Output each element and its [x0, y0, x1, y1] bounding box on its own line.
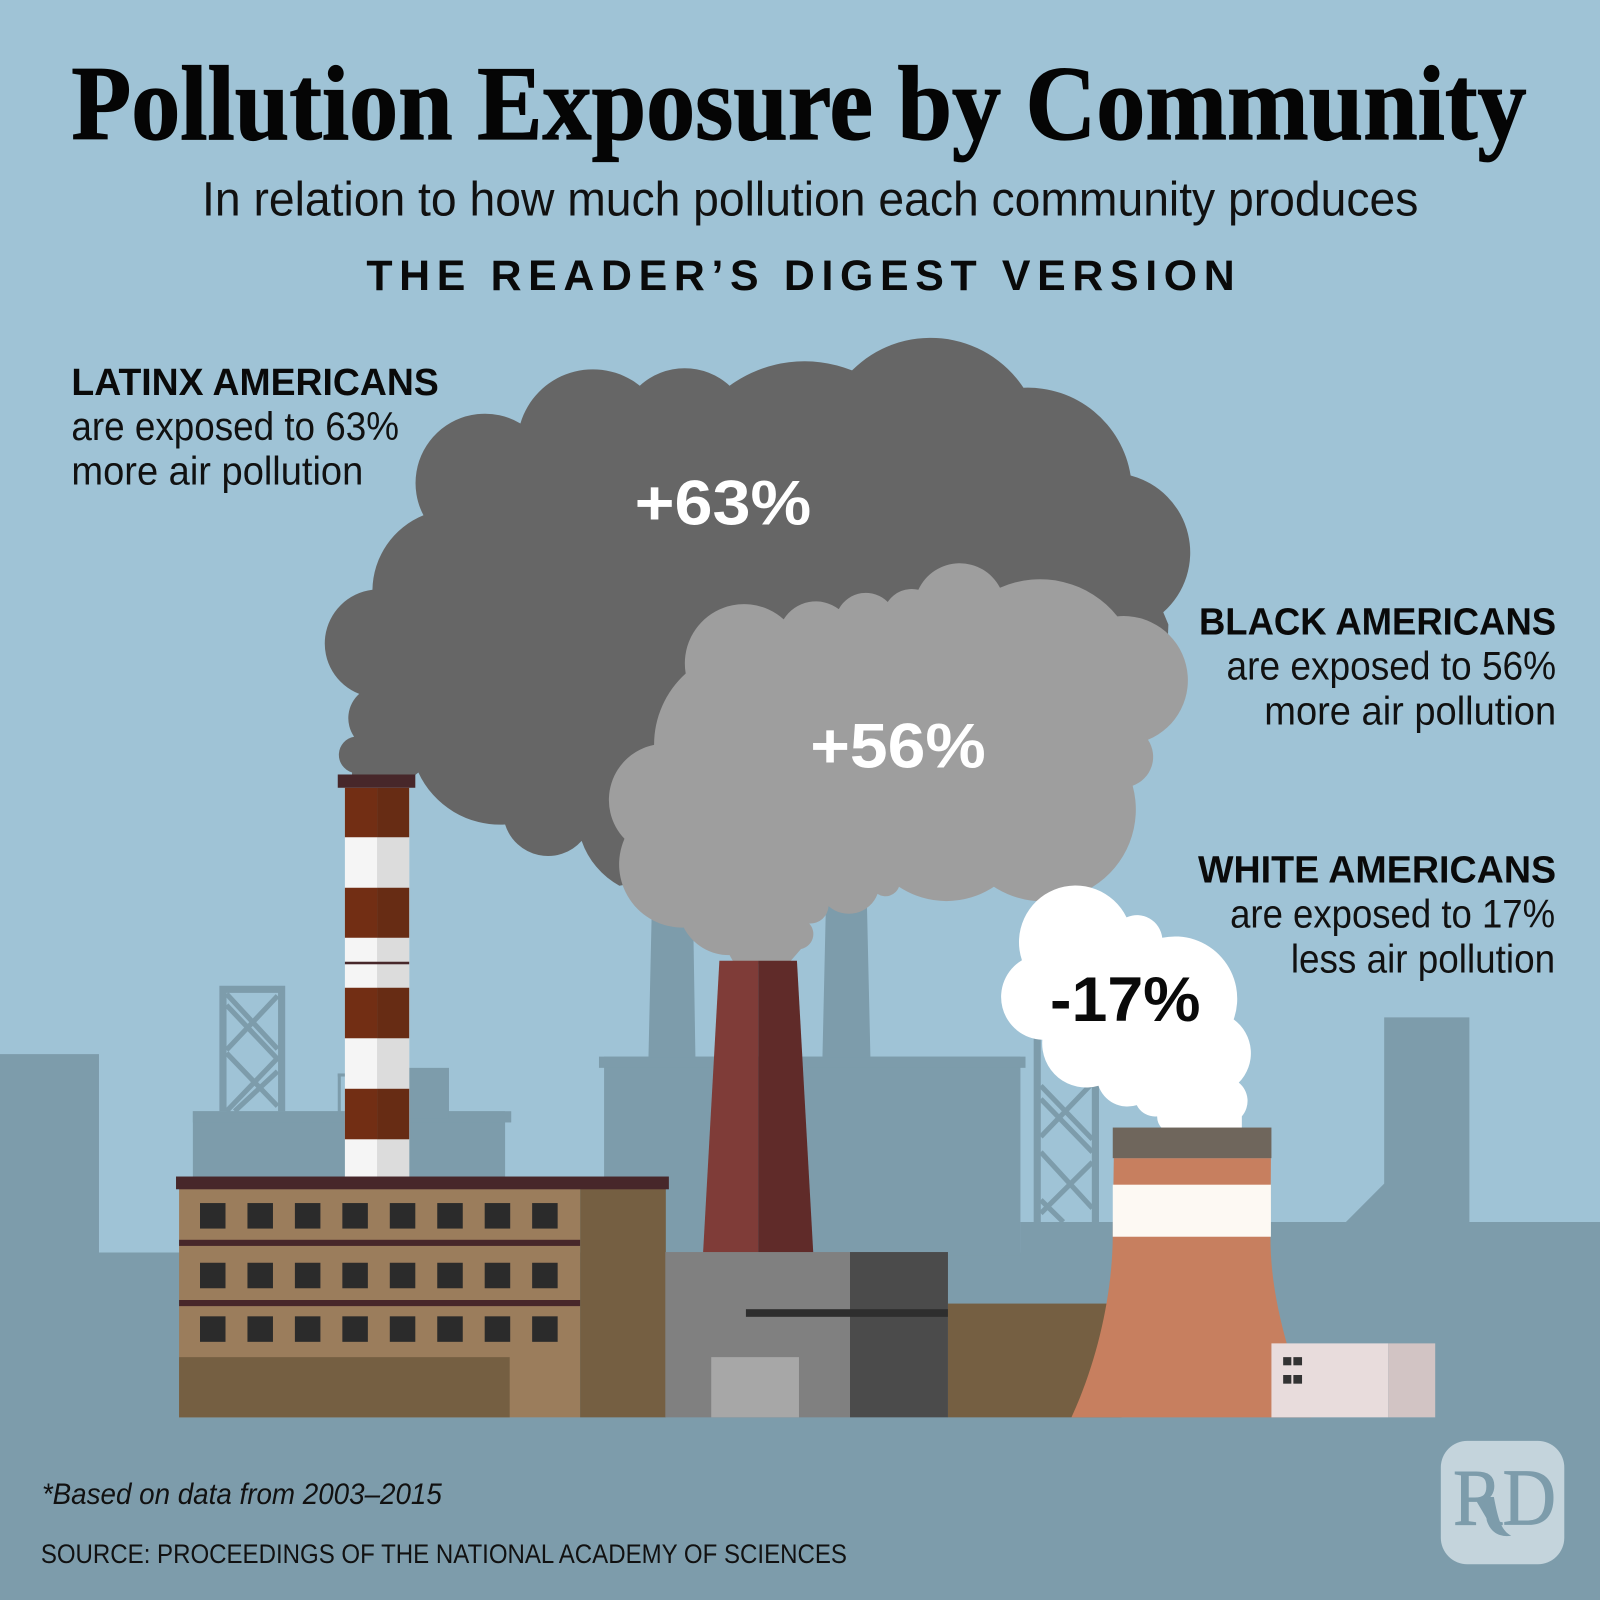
tagline: THE READER’S DIGEST VERSION — [366, 252, 1235, 300]
small pale annex — [1271, 1343, 1435, 1417]
text block: Black Americans: are exposed to 56% — [1227, 645, 1556, 689]
RD logo badge: RD — [1453, 1453, 1556, 1542]
text block: White Americans: WHITE AMERICANS — [1198, 849, 1556, 891]
striped smokestack — [338, 774, 415, 1177]
title: Pollution Exposure by Community — [71, 44, 1527, 162]
text block: White Americans — [1198, 849, 1556, 981]
text block: White Americans: are exposed to 17% — [1230, 893, 1555, 937]
text block: Latinx Americans: LATINX AMERICANS — [71, 361, 439, 403]
value: +63%: +63% — [635, 468, 811, 538]
footnote: *Based on data from 2003–2015 — [42, 1478, 442, 1511]
low brown block — [948, 1304, 1121, 1417]
text block: Black Americans — [1199, 601, 1556, 733]
subtitle: In relation to how much pollution each community produces — [202, 173, 1418, 226]
text block: Latinx Americans — [71, 361, 439, 494]
RD logo badge — [1441, 1441, 1564, 1564]
cooling tower — [1071, 1128, 1311, 1417]
text block: Black Americans: BLACK AMERICANS — [1199, 601, 1556, 643]
text block: Latinx Americans: more air pollution — [71, 450, 363, 494]
tapered maroon smokestack — [703, 961, 813, 1253]
text block: White Americans: less air pollution — [1291, 937, 1555, 981]
white smoke cloud — [1001, 886, 1251, 1129]
text block: Latinx Americans: are exposed to 63% — [71, 405, 399, 449]
grey plant building — [665, 1252, 948, 1417]
value: +56%: +56% — [810, 711, 986, 781]
dark smoke cloud — [325, 338, 1190, 886]
source line: SOURCE: PROCEEDINGS OF THE NATIONAL ACADEMY OF SCIENCES — [41, 1539, 847, 1569]
brown brick factory — [176, 1177, 669, 1417]
value: -17%: -17% — [1050, 965, 1201, 1035]
light smoke cloud — [609, 563, 1188, 964]
background skyline silhouette — [0, 878, 1600, 1600]
text block: Black Americans: more air pollution — [1264, 689, 1556, 733]
